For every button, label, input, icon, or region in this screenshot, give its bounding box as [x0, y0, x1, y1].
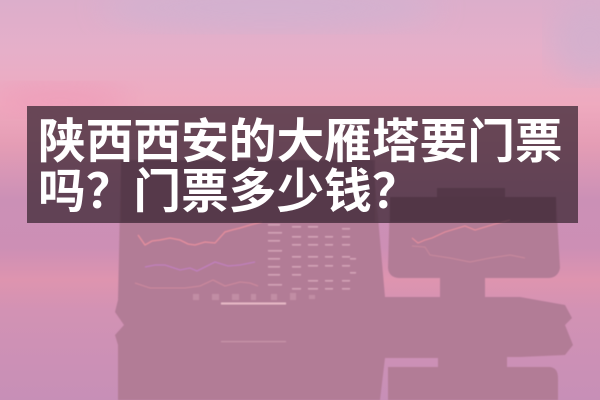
title: 陕西西安的大雁塔要门票 — [38, 103, 563, 172]
title: 吗？门票多少钱？ — [38, 153, 420, 222]
right chart lines — [412, 220, 510, 243]
desk and left monitor silhouette — [115, 160, 573, 400]
title — [38, 103, 563, 222]
darker monitor tops behind the title panel — [121, 160, 375, 222]
left chart lines — [138, 222, 262, 245]
panel: title background — [27, 106, 578, 223]
left table columns — [268, 224, 356, 290]
left monitor base icons and bar — [193, 293, 315, 300]
